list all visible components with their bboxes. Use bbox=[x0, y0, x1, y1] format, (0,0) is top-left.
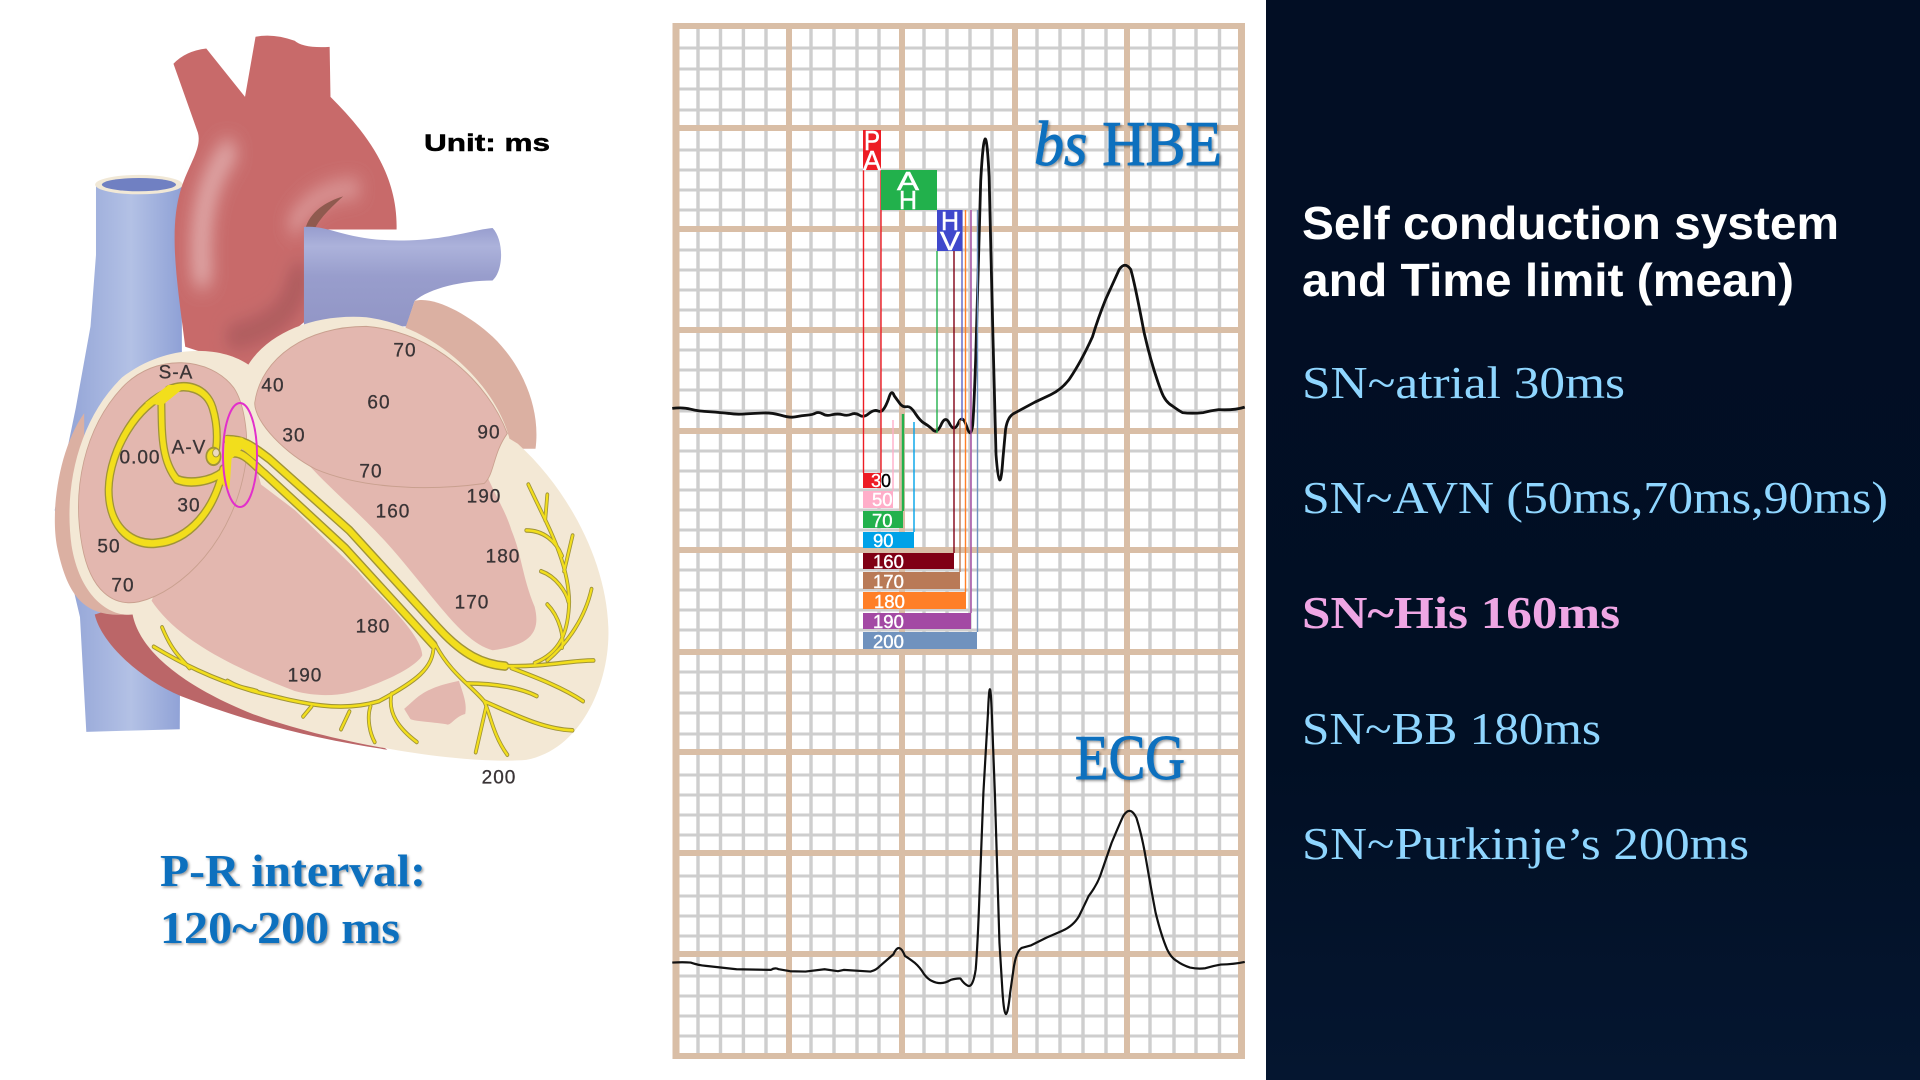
conduction times list bbox=[1302, 357, 1888, 869]
timing labels on heart: 60 bbox=[367, 392, 391, 414]
heart cross-section wall bbox=[69, 317, 608, 761]
grid paper bbox=[673, 23, 1245, 1059]
ECG trace bbox=[672, 689, 1245, 1014]
timing labels on heart: 30 bbox=[282, 426, 306, 446]
PA block: P bbox=[864, 125, 880, 156]
HBE trace bbox=[672, 139, 1245, 480]
aorta highlights bbox=[201, 153, 354, 337]
timing labels on heart: 40 bbox=[261, 376, 285, 396]
timing labels on heart: 160 bbox=[376, 502, 410, 522]
timing labels on heart: A-V bbox=[172, 438, 206, 458]
timing labels on heart: 190 bbox=[288, 666, 322, 686]
SA node and His bundle wedges bbox=[145, 385, 258, 490]
panel: heart conduction diagram bbox=[55, 36, 608, 953]
bar 170: 170 bbox=[873, 571, 904, 592]
pulmonary artery bbox=[304, 227, 501, 326]
PA block bbox=[863, 125, 881, 176]
timing labels on heart: 70 bbox=[359, 462, 383, 482]
P-R interval note: P-R interval: bbox=[160, 846, 426, 896]
sidebar title: and Time limit (mean) bbox=[1302, 254, 1794, 306]
timing labels on heart: 180 bbox=[356, 616, 390, 638]
timing labels on heart: 70 bbox=[393, 340, 417, 362]
sidebar title: Self conduction system bbox=[1302, 197, 1839, 249]
bar 200 bbox=[863, 631, 977, 652]
timing labels on heart: 0.00 bbox=[120, 448, 160, 468]
bar 180 bbox=[863, 591, 966, 612]
sidebar title bbox=[1302, 197, 1839, 306]
timing labels on heart: S-A bbox=[159, 362, 193, 384]
heart anatomy illustration bbox=[55, 36, 608, 761]
interval value bars bbox=[863, 470, 977, 652]
right atrium chamber bbox=[79, 363, 247, 603]
sidebar background bbox=[1266, 0, 1920, 1080]
panel: dark summary sidebar bbox=[1266, 0, 1920, 1080]
SN to His: SN~His 160ms bbox=[1302, 587, 1620, 638]
bar 50 bbox=[863, 489, 893, 510]
timing labels on heart: 170 bbox=[455, 592, 489, 614]
ECG label: ECG bbox=[1075, 722, 1185, 793]
SN to Purkinje: SN~Purkinje’s 200ms bbox=[1302, 818, 1749, 869]
bar 30: 0 bbox=[881, 470, 891, 491]
left atrium chamber bbox=[255, 326, 507, 488]
bar 30: 3 bbox=[871, 470, 881, 491]
lower posterior wall bbox=[95, 602, 387, 750]
SN to AVN: SN~AVN (50ms,70ms,90ms) bbox=[1302, 472, 1888, 523]
AH block: H bbox=[899, 185, 917, 215]
outer wall left bbox=[55, 413, 143, 615]
his bundle highlight ellipse bbox=[223, 403, 257, 507]
AH block bbox=[881, 166, 937, 215]
conduction system yellow pathways bbox=[109, 387, 594, 755]
bar 190 bbox=[863, 611, 971, 632]
bar 190: 190 bbox=[873, 611, 904, 632]
timing labels on heart: 180 bbox=[486, 546, 520, 568]
timing labels on heart: 70 bbox=[111, 576, 135, 596]
interval blocks PA AH HV bbox=[863, 125, 962, 256]
HV block: H bbox=[941, 206, 959, 236]
timing labels on heart bbox=[97, 340, 520, 788]
HV block: V bbox=[940, 226, 961, 256]
P-R interval note bbox=[160, 846, 426, 953]
bar 200: 200 bbox=[873, 631, 904, 652]
AH block: A bbox=[897, 166, 920, 196]
HBE label: bs HBE bbox=[1034, 108, 1222, 179]
bar 160: 160 bbox=[873, 551, 904, 572]
HV block bbox=[937, 206, 962, 256]
vena cava opening bbox=[95, 175, 183, 194]
bar 70: 70 bbox=[872, 510, 893, 531]
timing labels on heart: 200 bbox=[482, 768, 516, 788]
timing labels on heart: 90 bbox=[477, 422, 501, 444]
bar 160 bbox=[863, 551, 954, 572]
aorta bbox=[173, 36, 397, 367]
right ventricle chamber bbox=[152, 439, 422, 695]
conduction system outline bbox=[109, 387, 594, 755]
bar 50: 50 bbox=[872, 489, 893, 510]
bar 180: 180 bbox=[874, 591, 905, 612]
timing labels on heart: 30 bbox=[177, 496, 201, 516]
bar 90: 90 bbox=[873, 530, 894, 551]
unit label: Unit: ms bbox=[424, 130, 550, 157]
P-R interval note: 120~200 ms bbox=[160, 903, 400, 953]
PA block: A bbox=[863, 145, 881, 176]
timing labels on heart: 50 bbox=[97, 536, 121, 558]
lower chamber pocket bbox=[404, 681, 466, 725]
panel: ECG grid paper with traces bbox=[672, 23, 1245, 1059]
SN to atrial: SN~atrial 30ms bbox=[1302, 357, 1625, 408]
vena cava bbox=[55, 186, 182, 732]
interval guide lines bbox=[864, 170, 978, 632]
SN to bundle branches: SN~BB 180ms bbox=[1302, 703, 1601, 754]
aortic arch shadow bbox=[305, 196, 343, 230]
left ventricle chamber bbox=[290, 446, 536, 650]
bar 70 bbox=[863, 510, 903, 531]
outer wall right bbox=[404, 300, 536, 449]
bar 170 bbox=[863, 571, 960, 592]
bar 30 bbox=[863, 470, 891, 491]
bar 90 bbox=[863, 530, 914, 551]
timing labels on heart: 190 bbox=[467, 486, 501, 508]
